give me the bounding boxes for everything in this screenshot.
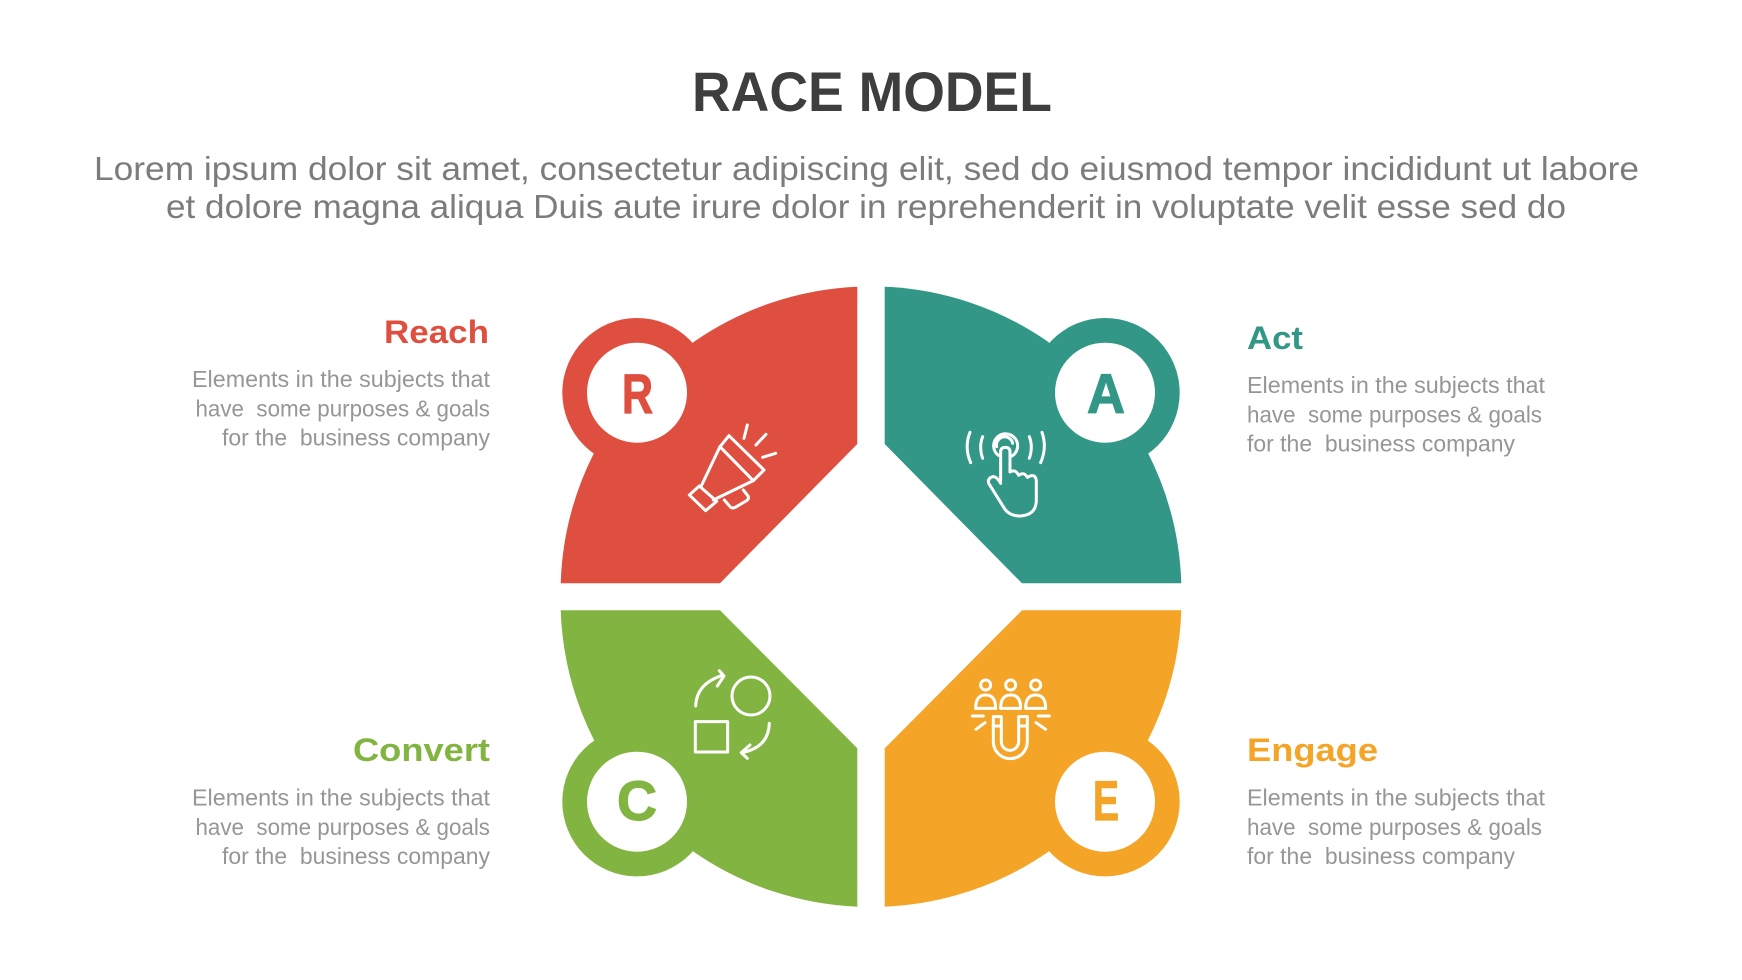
subtitle text: Lorem ipsum dolor sit amet, consectetur adipiscing elit, sed do eiusmod tempor incididunt ut labore	[94, 150, 1639, 187]
icon: touch hand	[967, 432, 1044, 516]
subtitle text	[94, 150, 1639, 225]
text block: Convert: for the business company	[222, 843, 490, 869]
text block: Engage: Elements in the subjects that	[1247, 784, 1545, 810]
title: RACE MODEL	[692, 60, 1052, 123]
text block: Reach: Elements in the subjects that	[192, 366, 490, 392]
text block: Convert	[192, 732, 490, 869]
text block: Act: have some purposes & goals	[1247, 402, 1542, 428]
text block: Convert: Elements in the subjects that	[192, 784, 490, 810]
text block: Act: for the business company	[1247, 430, 1515, 456]
letter E: E	[1093, 769, 1119, 832]
panel: Act quadrant	[885, 287, 1181, 583]
text block: Convert: have some purposes & goals	[196, 814, 490, 840]
panel: Convert quadrant	[561, 610, 857, 907]
subtitle text: et dolore magna aliqua Duis aute irure dolor in reprehenderit in voluptate velit esse sed do	[166, 188, 1566, 225]
letter A: A	[1087, 362, 1125, 425]
text block: Engage: have some purposes & goals	[1247, 814, 1542, 840]
text block: Reach: Reach	[384, 314, 489, 350]
text block: Act: Act	[1247, 320, 1303, 356]
text block: Reach	[192, 314, 490, 450]
panel: Engage quadrant	[885, 610, 1181, 907]
icon: megaphone	[689, 425, 776, 511]
icon: shapes cycle	[695, 671, 770, 758]
text block: Convert: Convert	[353, 732, 490, 768]
letter C: C	[617, 769, 657, 832]
letter R: R	[622, 362, 653, 425]
text block: Act: Elements in the subjects that	[1247, 372, 1545, 398]
text block: Engage: for the business company	[1247, 843, 1515, 869]
text block: Reach: for the business company	[222, 424, 490, 450]
panel: Reach quadrant	[561, 287, 857, 583]
icon: people magnet	[972, 680, 1049, 759]
text block: Engage	[1247, 732, 1545, 869]
text block: Reach: have some purposes & goals	[196, 396, 490, 422]
text block: Engage: Engage	[1247, 732, 1378, 768]
text block: Act	[1247, 320, 1545, 456]
